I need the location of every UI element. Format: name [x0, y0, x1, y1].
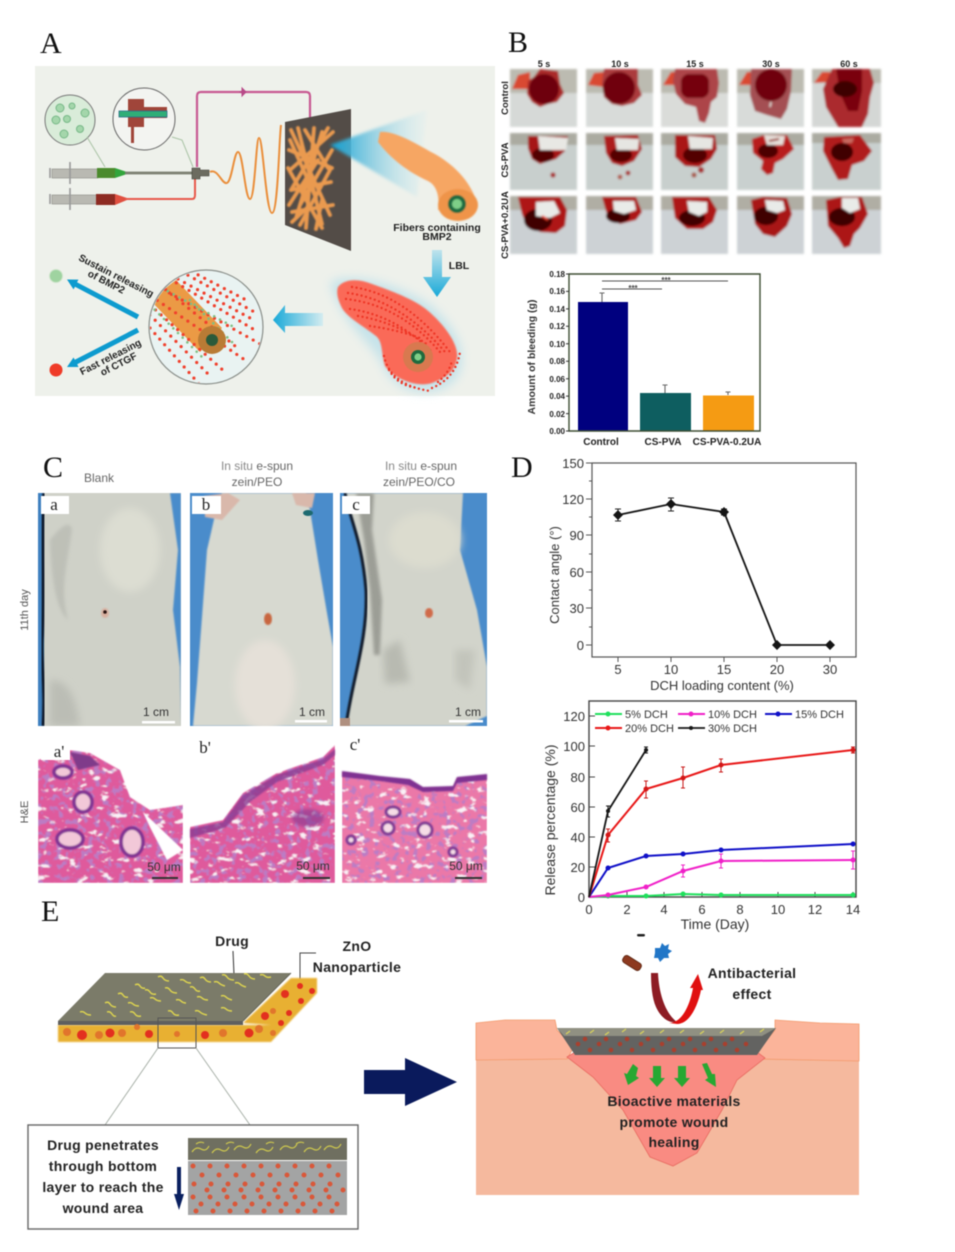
significance brackets: [602, 281, 728, 289]
inset: green particle solution circle: [45, 95, 105, 167]
label b: b: [202, 495, 210, 514]
y tick labels: 150: [562, 456, 584, 471]
histology c': [342, 735, 487, 883]
label a': a': [54, 742, 64, 761]
x tick labels: 6: [698, 902, 706, 917]
photo CS-PVA 5 s: [510, 133, 577, 190]
scale b': [296, 859, 330, 879]
label b: [192, 495, 221, 514]
label: fast releasing of CTGF: Fast releasing: [78, 338, 143, 378]
legend: 30% DCH: [708, 723, 757, 735]
scale bar b: [295, 705, 327, 722]
wound text: promote wound: [620, 1114, 728, 1130]
row labels: CS-PVA+0.2UA: [500, 191, 511, 259]
enlarged orange fiber: [378, 132, 478, 221]
ticks: [589, 716, 853, 897]
callout text: layer to reach the: [42, 1179, 164, 1195]
curved red arrow: [651, 973, 703, 1024]
x tick labels: 0: [585, 902, 593, 917]
label: fibers containing BMP2: Fibers containing: [393, 222, 481, 234]
gland circles c': [347, 807, 457, 856]
column titles: zein/PEO: [232, 475, 282, 489]
time headers: [538, 59, 858, 69]
y axis title: Release percentage (%): [542, 745, 558, 895]
release arrow BMP2: [67, 280, 139, 319]
scale a': 50 μm: [147, 860, 181, 874]
x category labels: CS-PVA: [644, 437, 682, 448]
label: ZnO nanoparticle: Nanoparticle: [313, 959, 401, 975]
antibacterial label: Antibacterial: [708, 965, 796, 981]
bacteria blue: [654, 943, 672, 962]
ticks: [566, 274, 569, 431]
photo c: [340, 493, 487, 726]
upper skin left: [476, 1020, 574, 1060]
bar control: [578, 302, 628, 431]
chart: contact angle: [547, 456, 856, 693]
series 20% DCH: [589, 747, 855, 897]
scale bar a: 1 cm: [143, 705, 169, 719]
zoom lines: [105, 1048, 250, 1125]
syringe upper: [50, 162, 195, 184]
y axis title: Amount of bleeding (g): [526, 300, 538, 414]
label a': [41, 741, 70, 761]
y tick labels: 0: [577, 638, 584, 653]
y axis title: Contact angle (°): [547, 526, 562, 624]
scale b': 50 μm: [296, 859, 330, 873]
panel label C: C: [43, 451, 63, 484]
y tick labels: 0: [578, 890, 585, 905]
series 10% DCH: [589, 851, 855, 897]
label c: [342, 495, 370, 514]
wound text: Bioactive materials: [607, 1093, 741, 1109]
panel label B: B: [508, 26, 528, 59]
time headers: 30 s: [762, 59, 780, 69]
x axis title: DCH loading content (%): [650, 678, 794, 693]
row labels: Control: [500, 81, 511, 115]
label c: c: [352, 495, 360, 514]
y tick labels: 40: [571, 830, 585, 845]
inset layer gray: [188, 1138, 347, 1160]
green arrow 4: [702, 1063, 716, 1087]
spray cone to enlarged fiber: [330, 110, 427, 197]
panel label D: D: [511, 451, 533, 484]
wound text: [607, 1093, 741, 1150]
inset: coaxial nozzle circle: [113, 88, 193, 167]
y tick labels: 30: [570, 601, 584, 616]
red CTGF ball: [50, 364, 62, 376]
panel label A: A: [40, 27, 62, 60]
column titles: zein/PEO/CO: [383, 475, 455, 489]
significance stars: ***: [661, 276, 672, 285]
photo CS-PVA+0.2UA 30 s: [737, 196, 804, 254]
photo control 10 s: [586, 69, 653, 127]
antibacterial label: effect: [732, 986, 772, 1002]
y tick labels: 0.10: [549, 340, 566, 349]
label: sustain releasing of BMP2: Sustain releasing: [76, 253, 155, 300]
x tick labels: 12: [808, 902, 822, 917]
y tick labels: 0.08: [549, 357, 566, 366]
x axis title: Time (Day): [681, 916, 749, 932]
y tick labels: 0.18: [549, 270, 566, 279]
scale c': 50 μm: [449, 859, 483, 873]
y tick labels: 0.02: [549, 410, 566, 419]
chart: release percentage: [542, 701, 860, 932]
dressing in wound: [557, 1028, 776, 1055]
photo control 15 s: [661, 69, 728, 127]
bar CS-PVA: [640, 393, 691, 431]
LBL label: LBL: [449, 260, 470, 272]
significance stars: [628, 276, 672, 293]
photo control 5 s: [510, 69, 577, 127]
x tick labels: 15: [717, 662, 731, 677]
x tick labels: 20: [770, 662, 784, 677]
down arrow: [174, 1167, 184, 1210]
y tick labels: [563, 709, 585, 905]
label a: a: [50, 495, 58, 514]
collector plate with fibers: [285, 109, 351, 251]
zoom selection square: [158, 1018, 196, 1048]
y tick labels: 0.00: [549, 427, 566, 436]
panel E: layered dressing: [28, 933, 401, 1229]
panel B: bleeding photo grid: [500, 59, 881, 259]
drug squiggles: [80, 974, 271, 1016]
y tick labels: [549, 270, 566, 436]
wound diagram: [476, 934, 859, 1195]
y tick labels: 80: [571, 770, 585, 785]
series 5% DCH: [589, 894, 853, 897]
row labels: [500, 81, 511, 259]
slab: yellow side and front: [58, 978, 317, 1042]
legend: 20% DCH: [625, 723, 674, 735]
label: fibers containing BMP2: [393, 222, 481, 243]
label a: [41, 495, 69, 514]
series line: [618, 504, 830, 645]
green arrow 2: [649, 1066, 665, 1087]
photo CS-PVA 30 s: [737, 133, 804, 190]
slab: gray drug layer: [58, 973, 291, 1025]
panel A background: [35, 66, 495, 396]
deep skin: [476, 1058, 859, 1195]
antibacterial label: [708, 965, 796, 1002]
scale bar c: 1 cm: [455, 705, 481, 719]
photo CS-PVA 15 s: [661, 133, 728, 190]
series 30% DCH: [589, 747, 648, 897]
panel A: electrospinning schematic: [35, 66, 495, 396]
x tick labels: 8: [736, 902, 744, 917]
wire marker: [240, 88, 246, 96]
markers: [613, 499, 835, 650]
legend: [595, 709, 844, 735]
label: drug: Drug: [215, 933, 249, 949]
photo CS-PVA+0.2UA 10 s: [586, 196, 653, 254]
scale bar c: [449, 705, 483, 722]
scale bar a: [142, 705, 175, 724]
label: ZnO nanoparticle: [300, 938, 401, 985]
label: drug: [215, 933, 249, 975]
histology b': [190, 738, 335, 883]
photo control 60 s: [812, 69, 881, 127]
time headers: 60 s: [840, 59, 858, 69]
error bars: [615, 498, 727, 521]
scale c': [449, 859, 483, 879]
callout text: through bottom: [49, 1158, 157, 1174]
x tick labels: 14: [846, 902, 860, 917]
photo CS-PVA+0.2UA 15 s: [661, 196, 728, 254]
blue arrow to magnified fiber: [273, 305, 323, 333]
y tick labels: 90: [570, 528, 584, 543]
callout text: wound area: [62, 1200, 143, 1216]
coaxial nozzle: [192, 168, 209, 179]
y tick labels: 60: [571, 800, 585, 815]
photo CS-PVA+0.2UA 5 s: [510, 196, 577, 254]
series 15% DCH: [589, 844, 853, 897]
y tick labels: 0.14: [549, 305, 566, 314]
wound bed: [567, 1052, 765, 1166]
significance stars: ***: [628, 284, 639, 293]
upper skin right: [757, 1020, 859, 1061]
wound text: healing: [648, 1134, 700, 1150]
ZnO particles: [63, 983, 315, 1040]
label b': b': [199, 738, 211, 757]
y tick labels: [562, 456, 584, 653]
y tick labels: 120: [563, 709, 585, 724]
y tick labels: 60: [570, 565, 584, 580]
x category labels: CS-PVA-0.2UA: [693, 437, 761, 448]
row labels: CS-PVA: [500, 142, 511, 178]
panel C: mouse wound photos: [19, 459, 487, 883]
label: sustain releasing of BMP2: of BMP2: [86, 269, 127, 297]
time headers: 15 s: [686, 59, 704, 69]
gland circles a': [54, 766, 143, 856]
column titles: [84, 459, 457, 489]
x tick labels: 30: [823, 662, 837, 677]
photo CS-PVA 10 s: [586, 133, 653, 190]
photo CS-PVA+0.2UA 60 s: [812, 196, 881, 254]
whipping jet: [210, 125, 281, 213]
scale bar b: 1 cm: [299, 705, 325, 719]
x tick labels: 4: [660, 902, 668, 917]
y tick labels: 0.06: [549, 375, 566, 384]
bar CS-PVA-0.2UA: [703, 396, 754, 431]
column titles: In situ e-spun: [221, 459, 293, 473]
frame: [589, 701, 856, 897]
x tick labels: [614, 662, 837, 677]
chart: amount of bleeding: [526, 270, 761, 448]
x category labels: [583, 437, 761, 448]
panel label E: E: [41, 895, 59, 928]
green BMP2 ball: [50, 270, 62, 282]
legend: 10% DCH: [708, 709, 757, 721]
photo control 30 s: [737, 69, 804, 127]
column titles: Blank: [84, 471, 115, 485]
inset layer with nanoparticles: [188, 1161, 347, 1215]
y tick labels: 120: [562, 492, 584, 507]
big navy arrow: [364, 1058, 457, 1106]
release arrow CTGF: [67, 328, 139, 367]
callout box: [28, 1125, 358, 1229]
photo a: [38, 493, 181, 726]
x tick labels: 10: [771, 902, 785, 917]
frame: [592, 463, 856, 657]
error bars: [600, 293, 730, 395]
label: fibers containing BMP2: BMP2: [422, 231, 452, 243]
x tick labels: [585, 902, 860, 917]
photo b: [190, 493, 333, 730]
y tick labels: 0.12: [549, 322, 566, 331]
magnified fiber circle: [145, 268, 263, 385]
green arrow 3: [674, 1066, 690, 1087]
green arrow 1: [624, 1064, 639, 1085]
LBL arrow: [423, 250, 451, 297]
photo CS-PVA 60 s: [812, 133, 881, 190]
x category labels: Control: [583, 437, 619, 448]
callout text: Drug penetrates: [47, 1137, 159, 1153]
label: fast releasing of CTGF: of CTGF: [99, 351, 139, 379]
x tick labels: 2: [623, 902, 631, 917]
chart frame: [569, 274, 760, 431]
histology a': [38, 741, 183, 883]
column titles: In situ e-spun: [385, 459, 457, 473]
x tick labels: 5: [614, 662, 622, 677]
time headers: 10 s: [611, 59, 629, 69]
small dark bacterium: [637, 934, 645, 936]
row label 11th day: 11th day: [19, 589, 31, 631]
time headers: 5 s: [538, 59, 550, 69]
label c': c': [350, 735, 360, 754]
syringe lower: [50, 178, 195, 210]
y tick labels: 0.16: [549, 287, 566, 296]
legend: 5% DCH: [625, 709, 668, 721]
ticks: [586, 463, 830, 662]
row label H&E: H&E: [19, 801, 31, 823]
y tick labels: 100: [563, 739, 585, 754]
bacteria rod: [621, 954, 643, 972]
label: ZnO nanoparticle: ZnO: [343, 938, 371, 954]
callout text: [42, 1137, 164, 1216]
x tick labels: 10: [664, 662, 678, 677]
y tick labels: 0.04: [549, 392, 566, 401]
coated red fiber: [330, 278, 462, 392]
high voltage wire: [197, 92, 310, 167]
legend: 15% DCH: [795, 709, 844, 721]
y tick labels: 20: [571, 860, 585, 875]
